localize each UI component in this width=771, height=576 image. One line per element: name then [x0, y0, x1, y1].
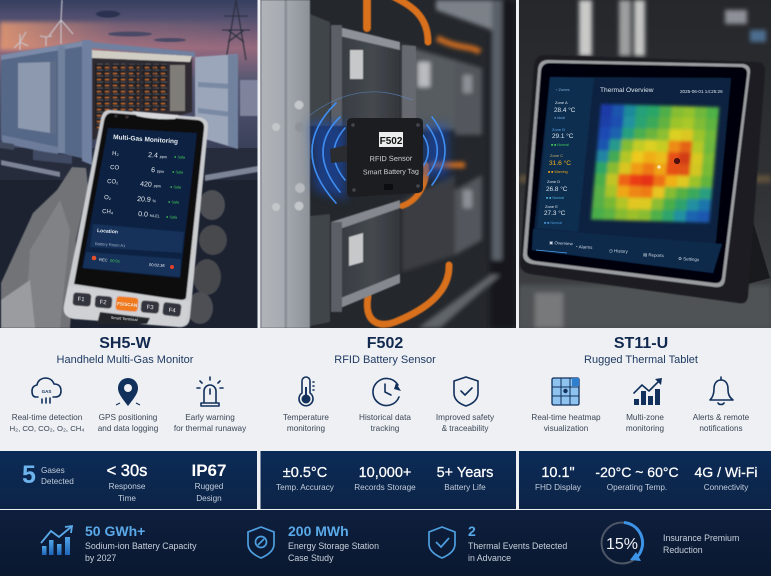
panel: F502 photo	[260, 0, 516, 328]
stat: IP67: Design	[196, 494, 222, 503]
metric: 50 GWh+: by 2027	[85, 553, 116, 563]
subheading: RFID: RFID Battery Sensor	[334, 354, 436, 366]
phone screen readout: Location	[97, 228, 118, 235]
icon: capacity chart	[41, 526, 72, 555]
phone screen readout: 00:0s	[110, 258, 120, 264]
panel: F502 stats	[260, 451, 516, 509]
thermal dashboard text: 31.6 °C	[549, 159, 571, 167]
phone screen readout: ● Safe	[172, 170, 183, 175]
feature text: multi-zone: Multi-zone	[626, 413, 664, 422]
stat: IP67: Rugged	[195, 482, 224, 491]
F502 RFID tag: F502	[380, 136, 403, 147]
icon: gas cloud: GAS	[42, 389, 51, 394]
thermal dashboard text: Zone A	[555, 100, 568, 105]
feature text: alerts: notifications	[699, 424, 743, 433]
thermal dashboard text: 29.1 °C	[552, 132, 574, 140]
phone screen readout: O₂	[104, 195, 112, 202]
tablet stand	[748, 223, 770, 284]
metric: insurance: Insurance Premium	[663, 533, 739, 543]
metric: 200 MWh: Energy Storage Station	[288, 541, 379, 551]
phone screen readout: REC	[99, 257, 108, 263]
F502 RFID tag: RFID Sensor	[370, 154, 413, 163]
feature text: historical: tracking	[371, 424, 400, 433]
phone screen readout: H₂	[112, 151, 120, 158]
thermal dashboard text: Zone D	[547, 179, 560, 184]
stat: IP67	[192, 461, 226, 503]
tablet tab bar: ⚙ Settings	[678, 256, 700, 262]
phone screen readout: ● Safe	[168, 200, 179, 205]
phone screen readout: 2.4 ppm	[148, 152, 167, 160]
feature text: heatmap	[531, 413, 601, 433]
heading: F502: F502	[367, 335, 403, 352]
metric: 50 GWh+	[85, 523, 197, 563]
phone screen readout: CH₄	[102, 209, 114, 216]
thermal dashboard text: 27.3 °C	[544, 209, 566, 217]
heatmap hot spot markers	[657, 158, 680, 169]
glove hand	[1, 167, 227, 328]
subheading: handheld: Handheld Multi-Gas Monitor	[57, 354, 194, 366]
F502 RFID tag: Smart Battery Tag	[363, 169, 419, 176]
thermal dashboard text: ■ ■ Normal	[544, 221, 562, 225]
stat: battery life: 5+ Years	[437, 465, 493, 481]
bottom metrics band	[0, 510, 771, 576]
tablet tab bar: ◔ Alarms	[575, 244, 593, 250]
feature text: alerts	[693, 413, 750, 433]
stat: temperature range: Operating Temp.	[607, 483, 667, 492]
tablet tab bar: ▣ Overview	[549, 240, 574, 246]
panel: SH5-W stats	[0, 451, 257, 509]
phone screen readout	[92, 134, 185, 269]
feature text: heatmap: visualization	[544, 424, 589, 433]
icon: shield gauge	[248, 527, 274, 558]
feature text: historical	[359, 413, 411, 433]
blurred rear battery rack	[402, 0, 516, 328]
icon: rising chart	[634, 378, 662, 405]
panel: ST11-U stats	[519, 451, 771, 509]
feature text: GPS: GPS positioning	[99, 413, 158, 422]
feature text: GPS	[98, 413, 159, 433]
phone screen readout: 420 ppm	[140, 181, 161, 189]
phone screen readout: CO₂	[107, 179, 119, 186]
phone function keys: F3	[146, 305, 154, 311]
phone screen readout: ● Safe	[166, 215, 177, 220]
thermal dashboard text: Zone B	[552, 127, 565, 132]
feature text: real-time detection	[10, 413, 84, 433]
icon: heatmap grid	[552, 378, 579, 405]
RFID signal arcs	[310, 92, 445, 203]
thermal dashboard text: ● Ideal	[554, 116, 565, 120]
thermal heatmap	[591, 104, 719, 223]
stat: response time	[107, 462, 147, 503]
phone function keys: F4	[168, 308, 177, 314]
metric: 200 MWh	[288, 523, 379, 563]
stat: connectivity: Connectivity	[704, 483, 749, 492]
icon: pylon	[222, 0, 250, 60]
stat: battery life	[437, 465, 493, 492]
stat: response time: < 30s	[107, 462, 147, 480]
stat: records: 10,000+	[359, 465, 411, 481]
battery modules	[310, 14, 416, 326]
feature text: GPS: and data logging	[98, 424, 159, 433]
stat: gases detected: Gases	[41, 466, 65, 475]
stat: gases detected	[22, 461, 74, 489]
metric: 200 MWh: 200 MWh	[288, 523, 349, 539]
phone screen readout: 6 ppm	[151, 167, 165, 175]
stat: gases detected: Detected	[41, 477, 74, 486]
phone screen readout: Multi-Gas Monitoring	[113, 134, 178, 146]
stat: display: FHD Display	[535, 483, 582, 492]
icon: thermometer	[299, 377, 314, 406]
blurred factory background	[519, 0, 771, 328]
metric: insurance: Reduction	[663, 545, 703, 555]
phone screen readout: 00:02:36	[149, 262, 166, 268]
steel rack post	[261, 0, 310, 328]
phone function keys	[77, 297, 177, 322]
stat: records: Records Storage	[354, 483, 416, 492]
phone screen readout: Battery Room A1	[95, 241, 126, 248]
stat: accuracy	[276, 465, 335, 492]
thermal dashboard text: 26.8 °C	[546, 185, 568, 193]
icon: bell	[710, 377, 733, 404]
feature text: heatmap: Real-time heatmap	[531, 413, 601, 422]
handheld device	[64, 110, 208, 327]
phone screen readout: 0.0 %LEL	[138, 211, 160, 220]
feature text: early warning: for thermal runaway	[174, 424, 247, 433]
feature text: safety: & traceability	[442, 424, 489, 433]
phone function keys: Smart Terminal	[111, 315, 138, 322]
stat: battery life: Battery Life	[444, 483, 486, 492]
tablet tab bar: ◷ History	[609, 248, 629, 254]
panel: ST11-U photo	[519, 0, 771, 328]
thermal dashboard text: ■ ■ Warning	[548, 170, 568, 174]
metric: 50 GWh+: 50 GWh+	[85, 523, 145, 539]
container	[0, 40, 238, 165]
RFID signal glow	[310, 122, 448, 200]
stat: response time: Time	[118, 494, 136, 503]
stat: accuracy: Temp. Accuracy	[276, 483, 335, 492]
stat: temperature range: -20°C ~ 60°C	[595, 464, 679, 480]
feature text: real-time detection: Real-time detection	[12, 413, 83, 422]
metric: 2 thermal events	[468, 523, 567, 563]
stat: gases detected: 5	[22, 461, 36, 489]
icon: shield check	[454, 377, 478, 406]
feature text: early warning	[174, 413, 247, 433]
feature text: real-time detection: H₂, CO, CO₂, O₂, CH₄	[10, 424, 84, 433]
tablet tab bar: ▤ Reports	[643, 252, 665, 258]
panel: ST11-U details	[531, 335, 750, 433]
feature text: multi-zone: monitoring	[626, 424, 665, 433]
icon: gas cloud	[32, 378, 61, 403]
phone function keys: F1	[77, 297, 85, 303]
stat: temperature range	[595, 464, 679, 492]
ground	[0, 148, 258, 180]
stat: accuracy: ±0.5°C	[283, 465, 327, 481]
metric: 200 MWh: Case Study	[288, 553, 334, 563]
phone function keys: FS/SCAN	[117, 301, 138, 308]
stat: IP67: IP67	[192, 461, 226, 480]
feature text: temperature: Temperature	[283, 413, 329, 422]
tablet tab bar	[536, 240, 700, 262]
thermal dashboard text: ‹ Zones	[556, 87, 570, 92]
stat: connectivity	[694, 464, 758, 492]
stat: display: 10.1"	[541, 465, 575, 481]
metric: 2 thermal events: in Advance	[468, 553, 511, 563]
metric: 2 thermal events: 2	[468, 523, 476, 539]
phone function keys: F2	[99, 300, 107, 306]
thermal dashboard text: 2025-06-01 14:25:26	[680, 89, 723, 94]
phone screen readout: 20.9 %	[137, 196, 157, 204]
tablet body	[520, 55, 765, 303]
icon: GPS pin	[116, 378, 140, 406]
thermal dashboard text: Thermal Overview	[600, 87, 654, 94]
subheading: tablet: Rugged Thermal Tablet	[584, 354, 698, 366]
phone screen readout: ● Safe	[170, 185, 181, 190]
stat: connectivity: 4G / Wi-Fi	[694, 464, 758, 480]
feature text: multi-zone	[626, 413, 665, 433]
orange cables	[367, 0, 449, 324]
thermal dashboard text: ■ ■ Normal	[546, 196, 564, 200]
thermal dashboard text: 28.4 °C	[554, 106, 576, 114]
feature text: alerts: Alerts & remote	[693, 413, 750, 422]
feature text: safety: Improved safety	[436, 413, 495, 422]
ring gauge: 15 percent	[602, 522, 643, 564]
stat: display	[535, 465, 582, 492]
heading: ST11-U: ST11-U	[614, 335, 668, 352]
thermal dashboard text	[544, 87, 723, 225]
F502 RFID tag	[330, 118, 423, 197]
ring gauge: 15 percent: 15%	[606, 536, 638, 553]
thermal dashboard text: Zone E	[545, 204, 558, 209]
icon: warning beacon	[197, 377, 223, 406]
panel: F502 details	[283, 335, 495, 433]
panel: SH5-W details	[10, 335, 247, 433]
phone screen readout: ● Safe	[174, 155, 185, 160]
feature text: temperature: monitoring	[287, 424, 326, 433]
icon: shield check	[429, 527, 455, 558]
heading: SH5-W: SH5-W	[99, 335, 152, 352]
metric: 2 thermal events: Thermal Events Detected	[468, 541, 567, 551]
icon: wind turbines	[14, 0, 73, 50]
feature text: early warning: Early warning	[185, 413, 235, 422]
stat: response time: Response	[109, 482, 146, 491]
thermal dashboard text: ■ ■ Normal	[551, 143, 569, 147]
feature text: historical: Historical data	[359, 413, 411, 422]
stat: records	[354, 465, 416, 492]
panel: SH5-W photo	[0, 0, 258, 328]
feature text: temperature	[283, 413, 329, 433]
phone screen readout: CO	[110, 165, 120, 172]
metric: insurance	[663, 533, 739, 555]
metric: 50 GWh+: Sodium-ion Battery Capacity	[85, 541, 197, 551]
thermal dashboard text: Zone C	[550, 153, 563, 158]
feature text: safety	[436, 413, 495, 433]
icon: history clock	[373, 379, 401, 406]
